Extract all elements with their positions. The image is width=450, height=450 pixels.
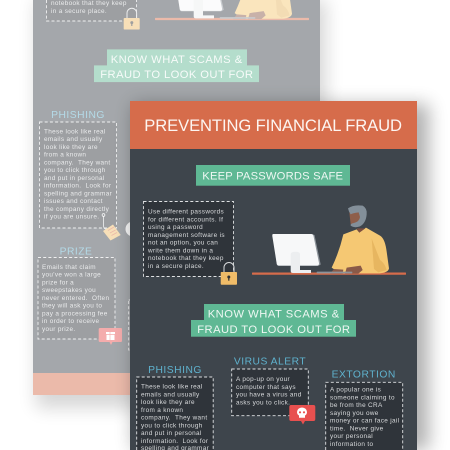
- text box: virus alert: computer that says: [236, 384, 296, 391]
- text box: prize: you've won a large: [42, 272, 101, 279]
- text box: prize: prize for a: [42, 280, 74, 286]
- text box: virus alert: [232, 369, 308, 416]
- heading: know what scams: KNOW WHAT SCAMS &: [111, 54, 243, 66]
- text box: phishing: if you are unsure.: [44, 214, 99, 221]
- text box: phishing: information. Look for: [44, 183, 112, 190]
- heading: phishing: PHISHING: [51, 110, 105, 121]
- footer band: [33, 373, 130, 395]
- text box: extortion: money or can face jail: [330, 418, 399, 424]
- text box: passwords: not an option, you can: [148, 240, 218, 247]
- heading: know what scams: KNOW WHAT SCAMS &: [208, 309, 340, 321]
- text box: phishing: emails and usually: [44, 136, 103, 143]
- title banner: PREVENTING FINANCIAL FRAUD: [144, 116, 402, 135]
- text box: phishing: look like they are: [44, 144, 98, 151]
- text box: extortion: A popular one is: [330, 386, 381, 394]
- text box: phishing: These look like real: [141, 384, 203, 391]
- text box: passwords: Use different passwords: [148, 209, 224, 216]
- text box: passwords: write them down in a: [147, 248, 213, 254]
- text box: phishing: you to click through: [141, 422, 203, 429]
- text box: phishing: [137, 377, 213, 450]
- text box: prize: they will ask you to: [42, 303, 102, 310]
- text box: prize: Emails that claim: [42, 264, 96, 271]
- text box: phishing: look like they are: [141, 399, 195, 406]
- text box: phishing: company. They want: [44, 160, 110, 166]
- text box: phishing: issues and contact: [44, 198, 103, 205]
- text box: prize: in order to receive: [42, 318, 100, 325]
- title banner: [130, 101, 417, 149]
- text box: phishing: from a known: [141, 407, 183, 414]
- text box: phishing: spelling and grammar: [44, 190, 113, 198]
- text box: passwords: using a password: [148, 224, 203, 231]
- text box: passwords: for different accounts. If: [148, 216, 223, 224]
- text box: phishing: and put in personal: [141, 430, 202, 437]
- heading: know what scams: [191, 304, 356, 337]
- text box: prize: sweepstakes you: [42, 287, 96, 294]
- panel: front infographic page: [130, 101, 417, 450]
- text box: phishing: information. Look for: [141, 438, 209, 445]
- text box: phishing: and put in personal: [44, 175, 105, 182]
- text box: phishing: the company directly: [44, 206, 110, 213]
- heading: keep passwords safe: KEEP PASSWORDS SAFE: [202, 170, 343, 182]
- text box: extortion: someone claiming to: [330, 394, 395, 401]
- text box: phishing: emails and usually: [141, 391, 200, 398]
- password text box: notebook that they keep: [51, 0, 127, 7]
- text box: phishing: you to click through: [44, 167, 106, 174]
- text box: prize: pay a processing fee: [42, 310, 108, 318]
- text box: prize: your prize.: [42, 326, 75, 333]
- text box: virus alert: asks you to click.: [236, 399, 290, 406]
- password text box: [46, 0, 136, 21]
- text box: virus alert: A pop-up on your: [236, 376, 290, 383]
- heading: keep passwords safe: [196, 165, 350, 186]
- text box: extortion: be from the CRA: [330, 402, 383, 409]
- text box: prize: never entered. Often: [42, 295, 109, 302]
- text box: extortion: time. Never give: [330, 425, 384, 432]
- heading: know what scams: [94, 49, 259, 82]
- text box: passwords: [144, 202, 234, 276]
- text box: passwords: notebook that they keep: [148, 255, 224, 262]
- heading: know what scams: FRAUD TO LOOK OUT FOR: [197, 324, 350, 336]
- heading: phishing: PHISHING: [148, 365, 202, 376]
- text box: passwords: in a secure place.: [148, 263, 204, 270]
- text box: extortion: [326, 382, 403, 450]
- panel: back infographic page: [33, 0, 320, 395]
- text box: phishing: These look like real: [44, 128, 106, 136]
- icon: padlock: [124, 8, 140, 30]
- icon: price tag: [102, 214, 121, 240]
- partial icon: skull bubble edge: [126, 222, 130, 236]
- text box: extortion: information to: [330, 441, 373, 448]
- partial text box edge: [128, 300, 130, 350]
- text box: phishing: [40, 122, 116, 228]
- icon: padlock: [221, 262, 237, 285]
- illustration: person at computer: [155, 0, 309, 20]
- text box: extortion: saying you owe: [330, 410, 379, 417]
- heading: extortion: EXTORTION: [332, 370, 396, 381]
- text box: passwords: management software is: [148, 232, 225, 239]
- text box: phishing: from a known: [44, 152, 86, 159]
- icon: skull speech bubble: [289, 405, 315, 424]
- heading: virus alert: VIRUS ALERT: [234, 356, 306, 368]
- illustration: person at computer: [252, 205, 406, 275]
- text box: virus alert: you have a virus and: [236, 392, 302, 398]
- password text box: in a secure place.: [51, 8, 107, 15]
- heading: know what scams: FRAUD TO LOOK OUT FOR: [100, 69, 253, 81]
- heading: prize: PRIZE: [60, 246, 92, 258]
- text box: phishing: company. They want: [141, 415, 207, 422]
- icon: gift speech bubble: [99, 328, 122, 345]
- text box: prize: [38, 258, 115, 339]
- text box: extortion: your personal: [330, 433, 373, 440]
